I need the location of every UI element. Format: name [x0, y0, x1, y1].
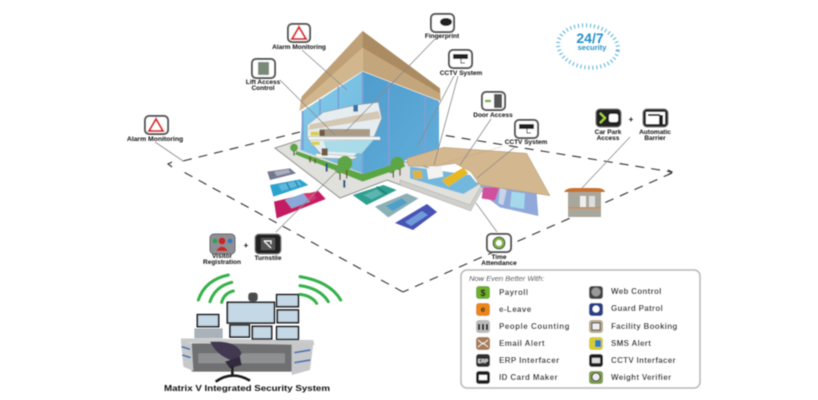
label: time attendance: Attendance [481, 260, 517, 267]
trees [290, 144, 404, 174]
right column: Facility Booking [611, 322, 678, 331]
roof right [363, 31, 441, 101]
label: visitor registration: Visitor [212, 253, 233, 260]
label: turnstile [255, 234, 282, 262]
label: fingerprint: Fingerprint [425, 33, 460, 40]
label: door access: Door Access [473, 112, 513, 119]
gray cars [267, 168, 296, 180]
teal cars [353, 185, 397, 205]
left column: e-Leave [499, 305, 532, 314]
plus sign: + [629, 115, 634, 124]
label: door access [473, 92, 513, 119]
tower left face [300, 72, 363, 173]
interior [410, 167, 478, 194]
plus sign: + [244, 241, 249, 250]
label: time attendance: Time [491, 254, 507, 261]
left column: Payroll [499, 288, 528, 297]
label: cctv upper: CCTV System [440, 70, 483, 77]
guard booth [564, 188, 605, 217]
left column: ERP Interfacer [499, 356, 560, 365]
plaza [275, 140, 483, 210]
label: cctv lower: CCTV System [505, 139, 548, 146]
left column: ID Card Maker [499, 373, 558, 382]
label: fingerprint [425, 14, 460, 40]
24/7 security logo: security [578, 43, 607, 52]
desk [192, 343, 293, 372]
right column: Weight Verifier [611, 373, 671, 382]
cutaway [307, 102, 382, 159]
left column: Email Alert [499, 339, 545, 348]
24/7 security logo: 24/7 [576, 30, 604, 46]
cyan cars [270, 179, 308, 197]
car rows [267, 168, 418, 218]
label: car park access [595, 109, 622, 142]
left column [476, 286, 570, 384]
label: alarm monitoring top [272, 24, 326, 51]
hedge [295, 151, 405, 182]
label: car park access: Car Park [595, 129, 622, 136]
tower [290, 31, 441, 188]
label: automatic barrier [639, 109, 671, 142]
panel heading: Now Even Better With: [469, 274, 544, 283]
control room [181, 293, 314, 382]
dashed perimeter [168, 132, 672, 292]
label: visitor registration [203, 234, 241, 266]
panel: now even better with [461, 270, 700, 388]
underside right [480, 185, 538, 216]
label: turnstile: Turnstile [255, 255, 282, 262]
label: visitor registration: Registration [203, 259, 241, 266]
label: automatic barrier: Automatic [639, 129, 671, 136]
chair [210, 341, 242, 362]
label: cctv upper [440, 50, 483, 77]
left column: $ [480, 288, 486, 298]
label: car park access: Access [597, 135, 620, 142]
label: lift access control: Lift Access [246, 79, 281, 86]
roof [407, 147, 550, 196]
label: alarm monitoring top: Alarm Monitoring [272, 44, 326, 51]
label: time attendance [481, 234, 517, 267]
roof left [299, 31, 363, 111]
magenta cars [274, 191, 326, 218]
tower right face [363, 72, 439, 174]
right column: CCTV Interfacer [611, 356, 676, 365]
label: lift access control: Control [251, 85, 275, 92]
label: automatic barrier: Barrier [644, 135, 666, 142]
left column: People Counting [499, 322, 570, 331]
left column: e [481, 305, 486, 314]
gray-blue cars [375, 193, 418, 217]
label: alarm monitoring left: Alarm Monitoring [127, 136, 183, 143]
label: cctv lower [505, 120, 548, 146]
wireless arcs [198, 275, 341, 303]
monitors [197, 295, 298, 339]
blue cars front [395, 204, 437, 230]
leader lines [155, 38, 630, 232]
right column: Web Control [611, 287, 662, 296]
right column: SMS Alert [611, 339, 651, 348]
label: lift access control [246, 59, 281, 92]
left column: ERP [478, 359, 489, 365]
right column [589, 286, 678, 384]
pavilion base [400, 180, 483, 211]
label: alarm monitoring left [127, 116, 183, 143]
pavilion [400, 147, 550, 216]
24/7 security logo [555, 22, 621, 71]
system title: Matrix V Integrated Security System [164, 383, 330, 393]
right column: Guard Patrol [611, 304, 663, 313]
